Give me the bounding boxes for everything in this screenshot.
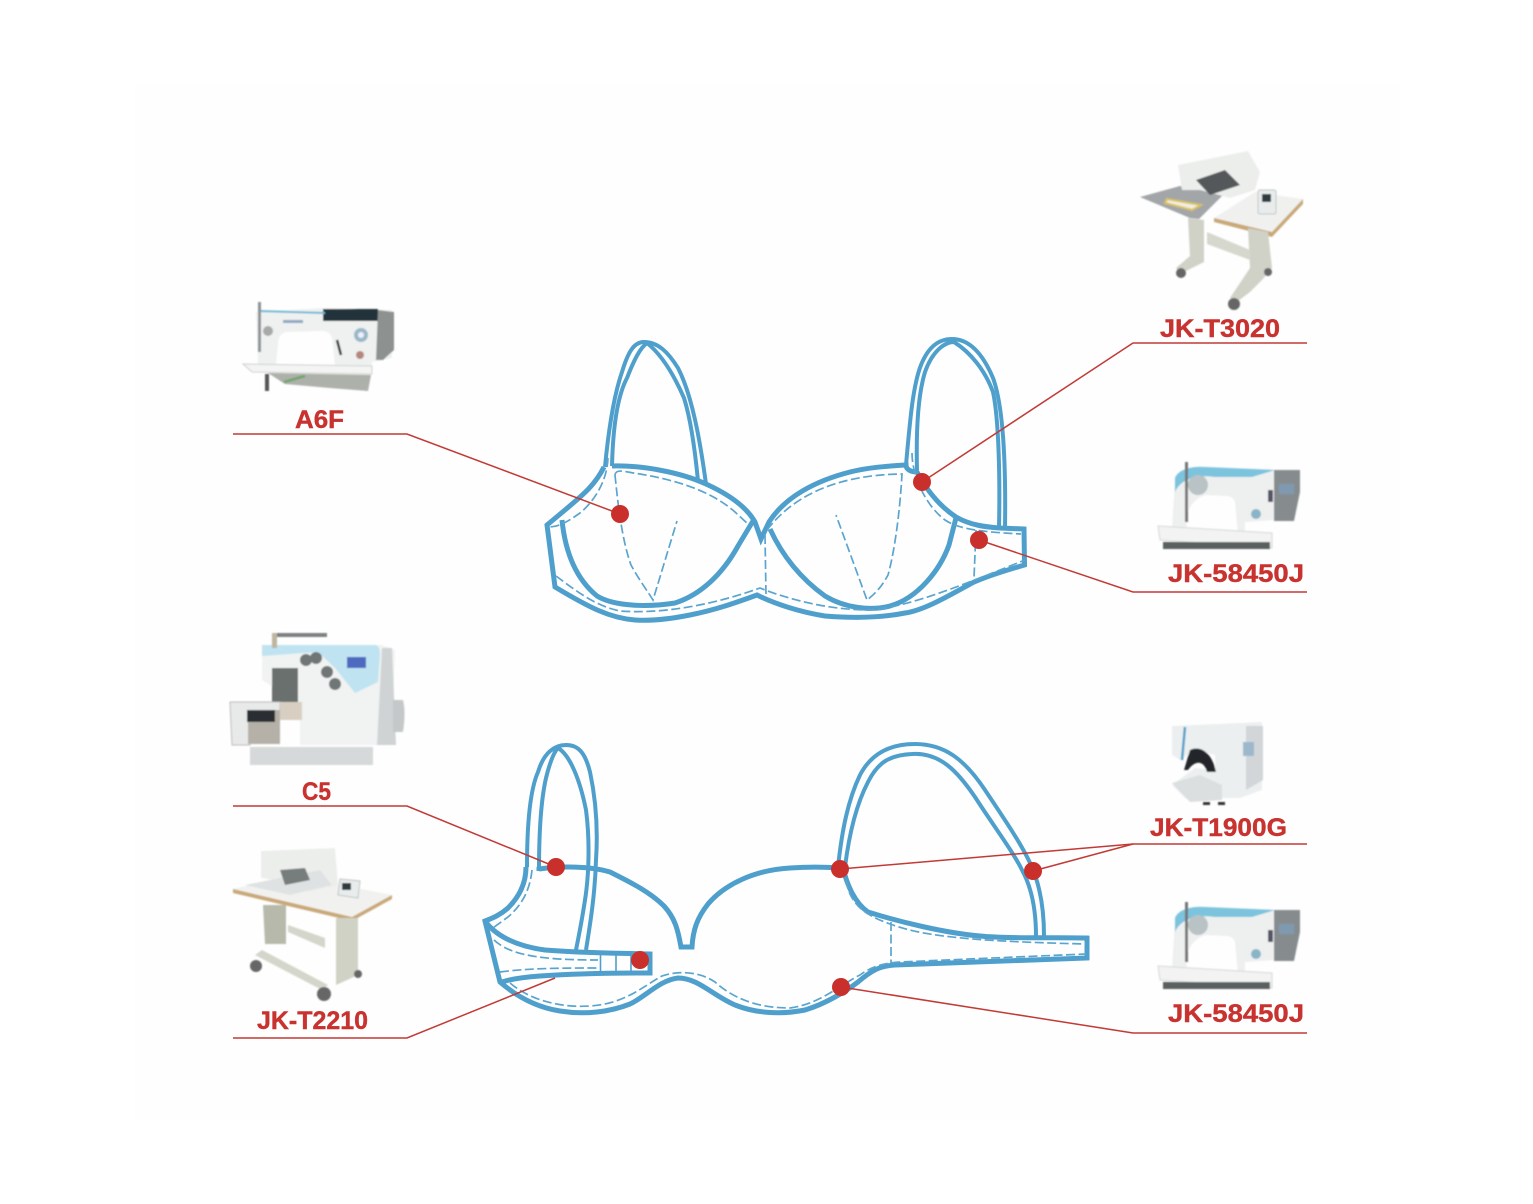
stitching lines [490,870,1086,1008]
machine: JK-58450J lower [1158,902,1300,989]
leader: JK-T3020 [922,343,1307,482]
left strap [527,745,597,950]
label: JK-58450J upper: JK-58450J [1168,560,1304,588]
leader: JK-T2210 [233,978,555,1038]
leader branch: JK-T1900G [1033,844,1133,871]
stitching lines [549,453,1025,612]
leader: JK-58450J lower [841,987,1307,1033]
neckline and cups [539,867,840,947]
marker dots [547,473,1042,996]
leader: JK-T1900G to two points [840,844,1307,869]
leader: JK-58450J upper [979,540,1307,592]
machine: C5 [230,633,404,765]
right underwire cup [770,518,956,608]
label: JK-T3020: JK-T3020 [1160,315,1280,343]
outer band and cup outline [547,465,1024,620]
label: JK-T2210: JK-T2210 [257,1007,368,1035]
right strap [906,339,1005,528]
outer wing and underwire outline [485,867,1087,1013]
machine: JK-T2210 [233,848,392,1001]
machine: JK-58450J [1158,462,1300,549]
left strap [605,342,706,484]
hook squares [600,954,631,973]
diagram: lower bra, outside view [485,744,1087,1013]
left underwire cup [562,520,753,605]
machine: JK-T1900G [1172,722,1263,805]
right strap [838,744,1044,936]
label: A6F: A6F [295,406,344,434]
left band [485,921,650,983]
machine: A6F [243,302,394,391]
leader: C5 [233,806,556,867]
diagram: upper bra, inside view [547,339,1025,620]
leader: A6F [233,434,620,514]
machine: JK-T3020 [1140,151,1303,310]
label: C5: C5 [302,778,331,806]
label: JK-58450J lower: JK-58450J [1168,1000,1304,1028]
label: JK-T1900G: JK-T1900G [1150,814,1287,842]
